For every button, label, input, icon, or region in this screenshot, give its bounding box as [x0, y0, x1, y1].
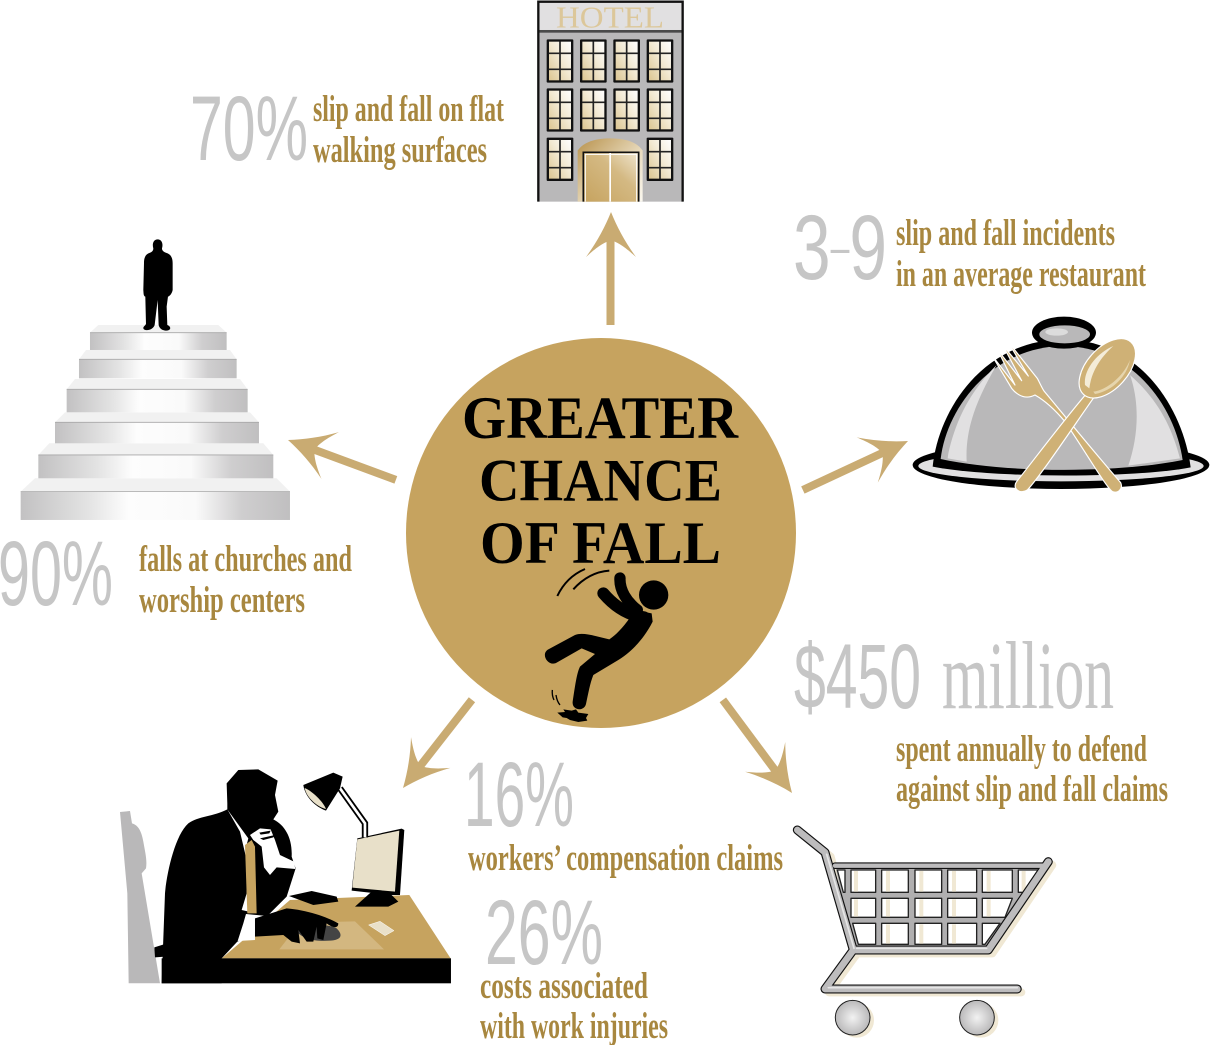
stat: 70% flat surfaces — [190, 78, 504, 180]
center circle — [406, 338, 796, 728]
wheel shadows — [839, 1003, 998, 1038]
wheels — [835, 1000, 870, 1035]
stat: 3-9 restaurant: 3 — [793, 197, 844, 299]
title — [462, 385, 739, 576]
arrow: down-right to cart — [703, 685, 812, 808]
icon: stairs with man — [21, 239, 290, 520]
card — [369, 921, 394, 936]
cell shadows — [854, 871, 1026, 944]
stat: 70% flat surfaces: walking surfaces — [313, 130, 487, 171]
title: CHANCE — [479, 448, 722, 514]
stat: 3-9 restaurant: 9 — [849, 197, 887, 299]
door — [578, 138, 643, 202]
basket — [835, 865, 1045, 950]
stat: 90% churches: falls at churches and — [139, 539, 352, 580]
chair — [120, 811, 160, 983]
icon: falling person — [545, 569, 668, 722]
lamp — [303, 773, 365, 837]
fork — [992, 328, 1146, 492]
cart shadow — [801, 833, 1052, 992]
monitor — [352, 829, 404, 907]
icon: office worker at desk — [120, 769, 451, 983]
basket cells — [837, 870, 1038, 944]
spoon — [1015, 393, 1094, 492]
keyboard on desk — [289, 891, 338, 905]
stat: 90% churches — [0, 523, 352, 625]
stat: 90% churches: 90% — [0, 523, 113, 625]
windows — [547, 39, 673, 181]
stat: $450 million — [794, 622, 1168, 810]
stat: 16% workers comp: 16% — [464, 744, 574, 846]
stat: 90% churches: worship centers — [139, 580, 305, 621]
person — [162, 769, 296, 983]
stat: 26% work injuries: costs associated — [480, 966, 648, 1007]
stat: 16% workers comp — [464, 744, 783, 879]
hotel sign: HOTEL — [556, 0, 664, 34]
stat: $450 million: $450 — [794, 626, 921, 728]
arrow: up to hotel — [586, 212, 636, 325]
stat: 3-9 restaurant — [793, 197, 1146, 299]
stat: 3-9 restaurant: – — [831, 221, 850, 273]
stat: 16% workers comp: workers’ compensation claims — [468, 838, 783, 879]
hand — [255, 908, 338, 943]
title: OF FALL — [480, 510, 721, 576]
arrow: right to restaurant — [792, 418, 919, 513]
arrow: left to stairs — [279, 417, 405, 503]
stat: 26% work injuries — [480, 882, 668, 1045]
icon: hotel building — [538, 0, 683, 202]
stat: 70% flat surfaces: 70% — [190, 78, 308, 180]
cart frame — [797, 830, 1048, 989]
arrow: down-left to office — [383, 684, 492, 803]
stat: 26% work injuries: 26% — [485, 882, 603, 984]
mouse — [295, 925, 341, 941]
desk — [222, 895, 451, 958]
icon: restaurant cloche — [913, 317, 1209, 492]
stat: 70% flat surfaces: slip and fall on flat — [313, 89, 504, 130]
icon: shopping cart — [797, 830, 1052, 1038]
man silhouette — [143, 239, 173, 331]
title: GREATER — [462, 385, 739, 451]
